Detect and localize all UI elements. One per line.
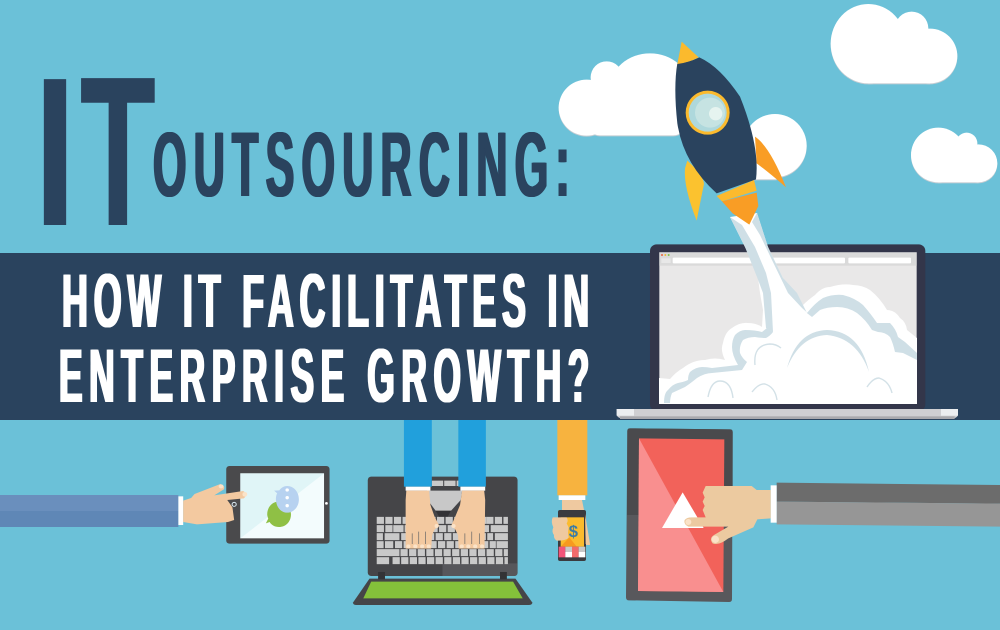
green chat bubble [266, 502, 291, 527]
dark notch between hands [436, 511, 451, 517]
exhaust left shading [730, 217, 773, 332]
nozzle [722, 193, 758, 225]
fingers [552, 517, 569, 541]
right sleeve [458, 420, 486, 487]
right hand [451, 491, 485, 549]
green panel [363, 582, 523, 598]
smoke arcs [708, 344, 892, 400]
tablet screen [240, 473, 328, 538]
rocket nose [677, 42, 699, 64]
play triangle [662, 492, 704, 528]
hinges [378, 572, 507, 579]
rocket [675, 42, 786, 225]
grey centre shape [427, 491, 462, 511]
laptop base [617, 409, 958, 419]
left fin [685, 161, 704, 221]
laptop lid [368, 477, 518, 576]
shop roof [561, 537, 577, 547]
laptop base [353, 579, 532, 605]
right cloud shading [807, 295, 917, 360]
top keys [432, 475, 459, 491]
cuff [178, 496, 183, 525]
porthole [686, 91, 730, 135]
laptop [617, 244, 958, 419]
hand [684, 486, 771, 544]
fingertips [685, 519, 719, 543]
rocket body [675, 57, 757, 193]
cuff [559, 495, 585, 500]
phone [558, 510, 586, 561]
tablet [226, 466, 330, 544]
cloud: behind rocket [743, 114, 807, 179]
phone thumb [585, 514, 590, 544]
headline [59, 259, 596, 419]
tablet button ring [232, 502, 236, 506]
title: IT: T [80, 33, 156, 270]
cuffs [406, 487, 485, 491]
smoke cloud [659, 213, 917, 404]
blue chat bubble [274, 486, 299, 513]
keyboard laptop [353, 420, 532, 605]
banner [0, 253, 1000, 420]
dollar sign: $ [569, 522, 579, 541]
left arm with tablet [0, 466, 330, 544]
phone screen [561, 517, 584, 547]
cloud: small right [911, 128, 997, 182]
tablet screen [638, 438, 724, 592]
sleeve [777, 483, 1000, 527]
title: IT [34, 33, 156, 271]
clouds [559, 4, 997, 182]
orange sleeve [557, 420, 587, 495]
title: IT: I [34, 34, 76, 271]
browser toolbar [659, 252, 917, 266]
awning [559, 547, 585, 557]
tablet [626, 428, 733, 602]
phone arm [552, 420, 590, 561]
left hand [406, 491, 439, 549]
finger gaps [412, 532, 479, 544]
left sleeve [404, 420, 432, 487]
screen diagonal [638, 438, 723, 592]
sleeve [0, 495, 178, 527]
tablet upper shading [627, 428, 733, 515]
fingertips [219, 484, 247, 497]
left cloud shading [664, 328, 773, 403]
large crescent [787, 330, 869, 372]
fingertips [406, 524, 484, 548]
nozzle band [717, 180, 757, 201]
cloud: left [559, 53, 690, 136]
hand [183, 484, 246, 524]
laptop bezel [650, 244, 925, 411]
wrist [562, 500, 590, 545]
cuff [771, 485, 777, 523]
right fin [755, 137, 786, 187]
big tablet with arm [626, 428, 1000, 602]
exhaust right shading [752, 213, 812, 317]
keys [377, 520, 508, 561]
cloud: top right [831, 4, 957, 83]
laptop screen [659, 252, 917, 404]
